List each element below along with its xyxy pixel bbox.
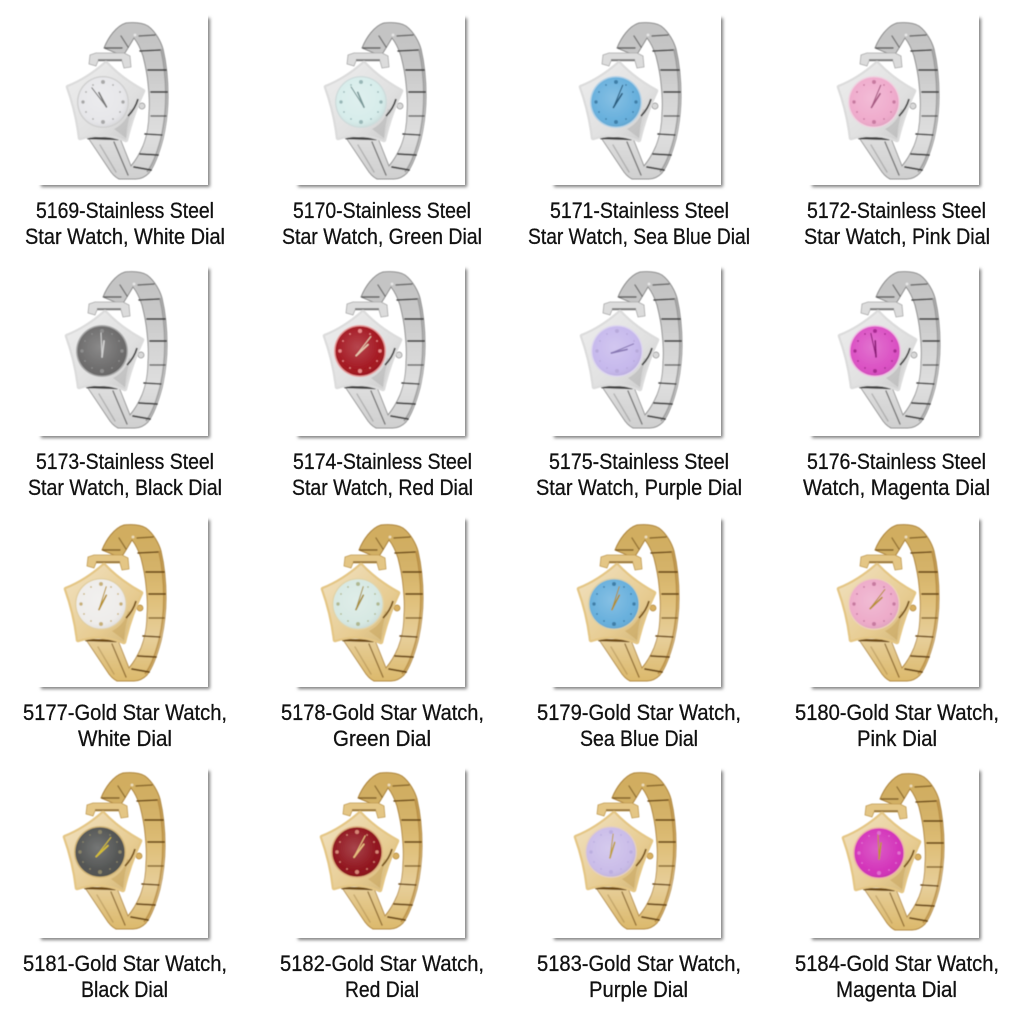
product card: 5174 [292, 263, 473, 500]
watch: gold, white dial [66, 525, 166, 681]
caption: 5179: 5179-Gold Star Watch, [537, 700, 741, 725]
caption: 5175 [536, 449, 742, 500]
product card: 5177 [23, 514, 227, 751]
caption: 5172: Star Watch, Pink Dial [804, 224, 990, 249]
caption: 5174 [292, 449, 473, 500]
caption: 5171: 5171-Stainless Steel [550, 198, 729, 223]
caption: 5174: 5174-Stainless Steel [293, 449, 472, 474]
caption: 5172: 5172-Stainless Steel [807, 198, 986, 223]
watch: steel, purple dial [582, 272, 682, 428]
watch: gold, pink dial [839, 525, 939, 681]
caption: 5183 [537, 951, 741, 1002]
product card: 5172 [804, 12, 990, 249]
caption: 5184: Magenta Dial [836, 977, 957, 1002]
caption: 5177: White Dial [78, 726, 172, 751]
caption: 5182: 5182-Gold Star Watch, [280, 951, 484, 976]
watch: gold, sea blue dial [579, 525, 679, 681]
watch: gold, purple dial [576, 773, 676, 929]
caption: 5180: 5180-Gold Star Watch, [795, 700, 999, 725]
product card: 5170 [282, 12, 482, 249]
caption: 5175: Star Watch, Purple Dial [536, 475, 742, 500]
caption: 5172 [804, 198, 990, 249]
product card: 5169 [25, 12, 225, 249]
product card: 5180 [795, 514, 999, 751]
caption: 5169: 5169-Stainless Steel [36, 198, 214, 223]
caption: 5183: 5183-Gold Star Watch, [537, 951, 741, 976]
watch: gold, magenta dial [844, 774, 944, 930]
caption: 5179: Sea Blue Dial [580, 726, 698, 751]
caption: 5176 [803, 449, 990, 500]
caption: 5179 [537, 700, 741, 751]
caption: 5171 [528, 198, 750, 249]
caption: 5176: Watch, Magenta Dial [803, 475, 990, 500]
product card: 5178 [281, 514, 484, 751]
product card: 5176 [803, 263, 990, 500]
product card: 5181 [23, 765, 227, 1002]
watch: steel, red dial [325, 272, 425, 428]
caption: 5177: 5177-Gold Star Watch, [23, 700, 227, 725]
caption: 5173: Star Watch, Black Dial [28, 475, 222, 500]
watch: steel, sea blue dial [581, 23, 681, 179]
caption: 5170: 5170-Stainless Steel [293, 198, 471, 223]
caption: 5177 [23, 700, 227, 751]
watch: gold, red dial [322, 773, 422, 929]
caption: 5176: 5176-Stainless Steel [807, 449, 986, 474]
watch: steel, white dial [68, 23, 168, 179]
caption: 5183: Purple Dial [589, 977, 688, 1002]
product card: 5171 [528, 12, 750, 249]
product card: 5173 [28, 263, 222, 500]
watch: gold, black dial [65, 773, 165, 929]
watch: steel, magenta dial [840, 272, 940, 428]
caption: 5169 [25, 198, 225, 249]
caption: 5178: 5178-Gold Star Watch, [281, 700, 484, 725]
caption: 5181: Black Dial [81, 977, 168, 1002]
watch: steel, green dial [326, 23, 426, 179]
caption: 5175: 5175-Stainless Steel [549, 449, 729, 474]
product card: 5175 [536, 263, 742, 500]
caption: 5182: Red Dial [345, 977, 419, 1002]
caption: 5173: 5173-Stainless Steel [36, 449, 214, 474]
caption: 5184 [795, 951, 999, 1002]
caption: 5178 [281, 700, 484, 751]
caption: 5178: Green Dial [333, 726, 431, 751]
product card: 5184 [795, 765, 999, 1002]
caption: 5170 [282, 198, 482, 249]
product card: 5182 [280, 765, 484, 1002]
caption: 5184: 5184-Gold Star Watch, [795, 951, 999, 976]
caption: 5181 [23, 951, 227, 1002]
caption: 5171: Star Watch, Sea Blue Dial [528, 224, 750, 249]
caption: 5181: 5181-Gold Star Watch, [23, 951, 227, 976]
watch: steel, pink dial [839, 23, 939, 179]
caption: 5182 [280, 951, 484, 1002]
product card: 5183 [537, 765, 741, 1002]
caption: 5170: Star Watch, Green Dial [282, 224, 482, 249]
caption: 5169: Star Watch, White Dial [25, 224, 225, 249]
watch: steel, black dial [67, 272, 167, 428]
caption: 5180: Pink Dial [857, 726, 937, 751]
caption: 5174: Star Watch, Red Dial [292, 475, 473, 500]
caption: 5180 [795, 700, 999, 751]
caption: 5173 [28, 449, 222, 500]
product card: 5179 [537, 514, 741, 751]
watch: gold, green dial [323, 525, 423, 681]
